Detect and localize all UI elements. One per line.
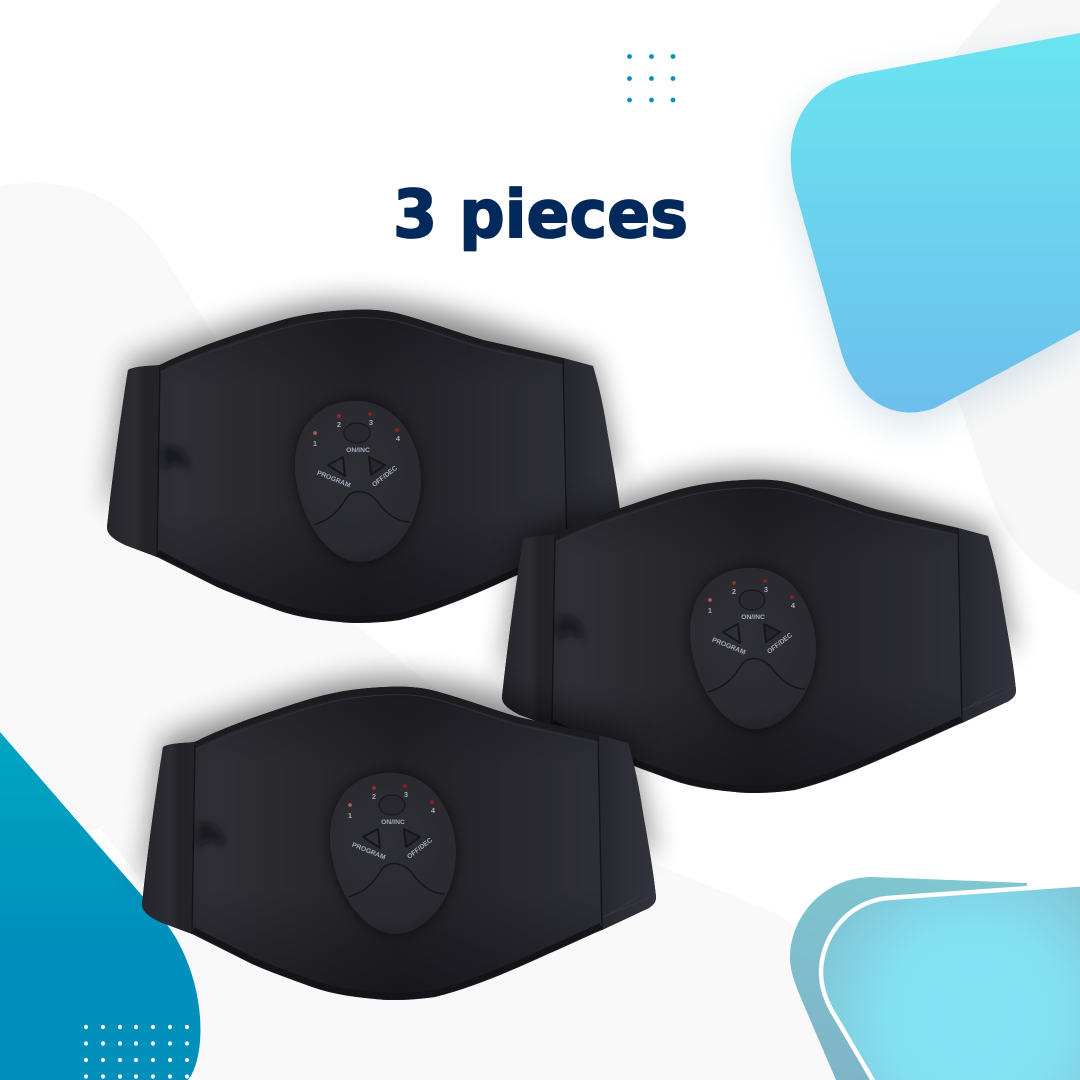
belt 3 control pod: 4 [431, 806, 436, 815]
belt 1 control pod [295, 401, 421, 562]
title: 3 pieces [393, 176, 688, 253]
belt 3 control pod: ON/INC [381, 819, 405, 826]
background blob: bottom grey [100, 620, 835, 1080]
belt 2 control pod: OFF/DEC [766, 632, 794, 656]
dot grid: bottom-left [84, 1025, 189, 1079]
belt 3 fabric [142, 687, 656, 1000]
belt 1 control pod: 1 [313, 439, 317, 448]
belt 2 control pod: 4 [791, 601, 796, 610]
background blob: top-right grey [901, 0, 1080, 594]
decorative shape: bottom-right teal with white outline [790, 877, 1080, 1080]
belt 1 control pod: PROGRAM [316, 470, 352, 490]
product: belt 1 (top left) [107, 300, 621, 623]
product: belt 3 (bottom left) [142, 677, 656, 1000]
belt 1 fabric [107, 310, 621, 623]
belt 2 fabric [502, 480, 1016, 793]
belt 1 control pod: 4 [396, 434, 401, 443]
belt 2 control pod: 2 [732, 587, 736, 596]
belt 1 control pod: 3 [369, 418, 373, 427]
belt 2 control pod: ON/INC [741, 614, 765, 621]
belt 2 shadow [502, 470, 1016, 680]
belt 3 control pod: 1 [348, 811, 352, 820]
belt 2 control pod: PROGRAM [711, 637, 747, 657]
belt 3 control pod: OFF/DEC [406, 837, 434, 861]
belt 3 control pod [330, 773, 456, 934]
belt 1 control pod: 2 [337, 420, 341, 429]
dot grid: top [627, 54, 675, 102]
belt 1 shadow [107, 300, 621, 510]
belt 3 control pod: PROGRAM [351, 842, 387, 862]
belt 2 control pod: 1 [708, 606, 712, 615]
belt 3 shadow [142, 677, 656, 887]
belt 2 control pod [690, 568, 816, 729]
belt 3 control pod: 3 [404, 790, 408, 799]
belt 3 control pod: 2 [372, 792, 376, 801]
belt 1 control pod: OFF/DEC [371, 465, 399, 489]
decorative shape: top-right cyan card [791, 33, 1080, 424]
belt 1 control pod: ON/INC [346, 447, 370, 454]
background blob: left grey [0, 183, 351, 880]
belt 2 control pod: 3 [764, 585, 768, 594]
product: belt 2 (middle right) [502, 470, 1016, 793]
decorative shape: bottom-left teal [0, 732, 200, 1080]
